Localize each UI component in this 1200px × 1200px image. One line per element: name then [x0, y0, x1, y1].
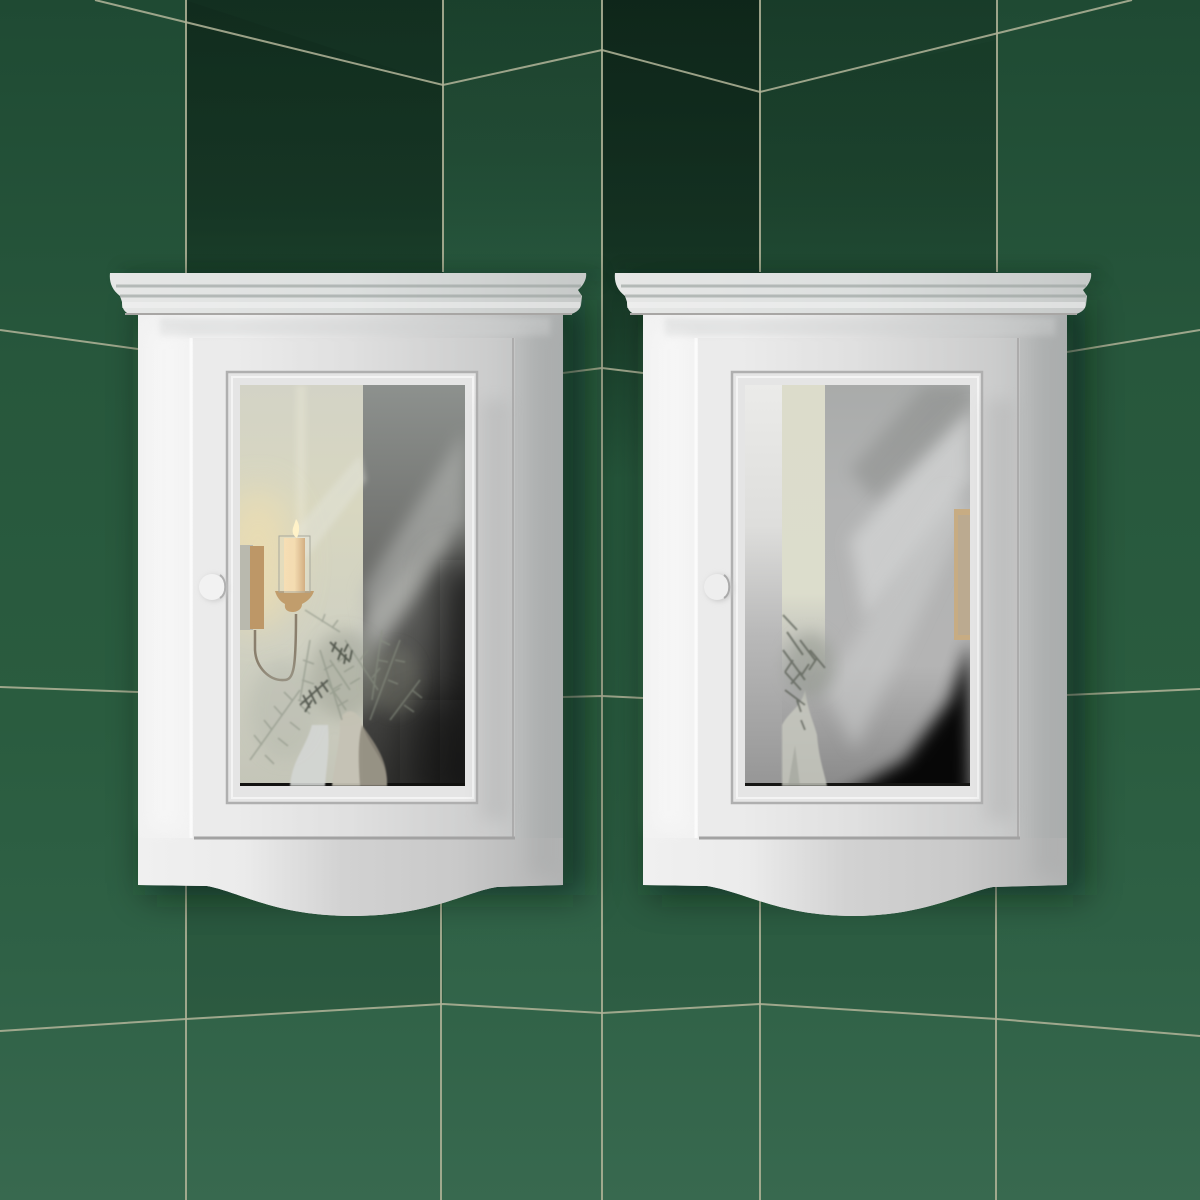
right door panel: [696, 338, 1020, 838]
cabinet shadows on wall: [120, 268, 1100, 895]
right mirror with reflection: [745, 385, 970, 800]
body side highlights: [146, 330, 558, 875]
right body side highlights: [651, 330, 1063, 875]
door panel: [191, 338, 515, 838]
reflected foliage and vase: [782, 615, 834, 786]
right cornice: [615, 273, 1091, 315]
door knob: [199, 574, 227, 601]
mirror frame: [227, 372, 477, 803]
right cabinet body with scalloped bottom: [643, 315, 1067, 916]
right door knob: [704, 574, 732, 601]
cabinet body with scalloped bottom: [138, 315, 563, 916]
mirror with reflection: [240, 385, 465, 786]
foliage and vases: [250, 610, 422, 786]
left cabinet: [110, 273, 586, 916]
cornice: [110, 273, 586, 315]
sconce with candle: [240, 519, 314, 680]
right mirror frame: [732, 372, 982, 803]
right cabinet: [615, 273, 1091, 916]
reflected sconce plate: [954, 509, 970, 640]
